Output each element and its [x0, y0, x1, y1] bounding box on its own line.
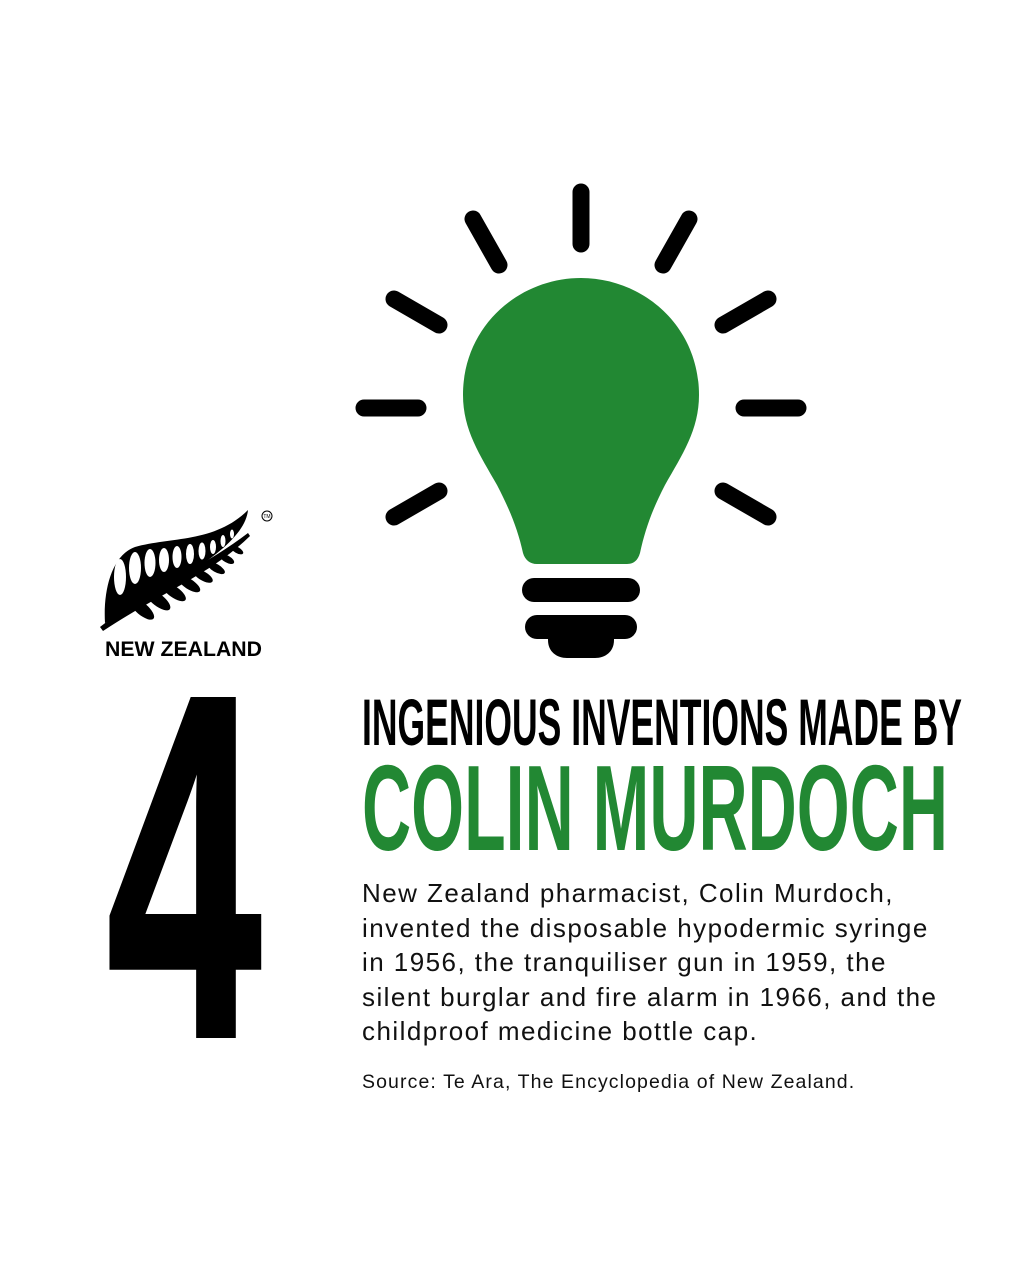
title — [362, 690, 962, 860]
body text: in 1956, the tranquiliser gun in 1959, the — [362, 947, 887, 977]
body text: childproof medicine bottle cap. — [362, 1016, 758, 1046]
icon: light bulb — [356, 184, 806, 658]
body text: New Zealand pharmacist, Colin Murdoch, — [362, 878, 894, 908]
body text: silent burglar and fire alarm in 1966, and the — [362, 982, 937, 1012]
icon: fern: TM — [263, 514, 271, 520]
logo: New Zealand fern — [100, 510, 272, 660]
icon: fern — [100, 510, 272, 631]
source: Source: Te Ara, The Encyclopedia of New Zealand. — [362, 1071, 855, 1093]
body text — [362, 878, 937, 1046]
body text: invented the disposable hypodermic syringe — [362, 912, 929, 942]
